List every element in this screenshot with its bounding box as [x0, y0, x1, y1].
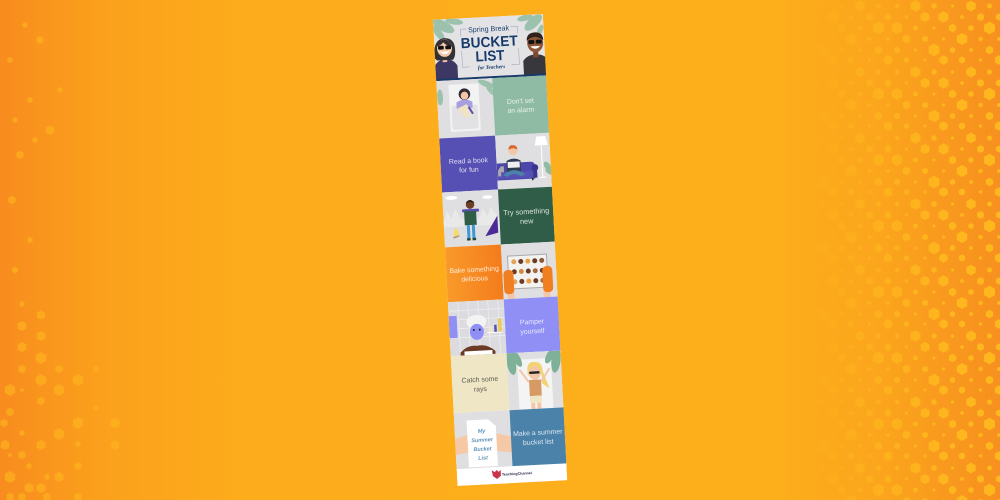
row 3 right: Try something new: Try something	[503, 206, 549, 217]
title: Spring Break: Spring Break	[468, 23, 510, 34]
paper text	[471, 428, 495, 462]
title: for Teachers: for Teachers	[478, 64, 505, 71]
row 6 left: Catch some rays: Catch some	[461, 376, 499, 385]
campfire	[453, 228, 459, 238]
header panel	[430, 11, 548, 81]
character: man	[522, 32, 547, 75]
row 4 right: cookie tray	[501, 242, 558, 299]
row 1 left: sleeping in bed	[436, 77, 499, 139]
sunbather	[519, 361, 551, 410]
row 5 right: Pamper yourself	[504, 297, 560, 353]
blanket	[452, 104, 479, 130]
palm leaves	[504, 347, 563, 376]
paper	[467, 419, 498, 467]
palm leaves	[437, 80, 493, 106]
palm leaves left	[433, 18, 463, 40]
hiker	[461, 200, 481, 241]
poster: bucket list	[430, 10, 572, 486]
distant trees	[443, 207, 500, 227]
right oven mitt	[542, 266, 554, 297]
row 1 right: Don't set an alarm: an alarm	[507, 107, 535, 115]
row 3 right: Try something new	[498, 187, 555, 244]
right hand	[495, 432, 512, 453]
row 6 left: Catch some rays	[451, 353, 510, 413]
row 3 left: camping	[442, 190, 501, 247]
cat	[498, 166, 504, 176]
row 2 left: Read a book for fun: for fun	[459, 167, 479, 175]
woman with towel and mask	[459, 314, 496, 356]
row 5 left: face mask and bath	[448, 299, 507, 356]
navy header rule	[436, 73, 546, 81]
baking tray	[507, 254, 548, 289]
row 1 right: Don't set an alarm: Don't set	[507, 98, 534, 106]
row 4 left: Bake something delicious: delicious	[461, 275, 489, 284]
bed	[448, 83, 481, 132]
sleeping woman	[456, 88, 473, 109]
paper text: My	[478, 428, 487, 435]
row 4 left: Bake something delicious: Bake something	[449, 266, 499, 275]
floor lamp	[534, 136, 548, 178]
title frame	[461, 26, 519, 67]
cookies	[511, 258, 545, 284]
cloud right	[482, 195, 492, 199]
left oven mitt	[503, 270, 515, 299]
character: woman	[433, 38, 458, 80]
row 7 right: Make a summer bucket list: Make a summer	[513, 428, 563, 438]
row 5 right: Pamper yourself: Pamper	[520, 318, 545, 327]
lavender	[469, 107, 473, 114]
palm leaves right	[517, 14, 544, 34]
footer logo: Teaching Channel	[492, 468, 532, 479]
shelf with bottles	[487, 319, 502, 333]
row 2 right: reading on couch	[495, 133, 556, 190]
row 3 right: Try something new: new	[520, 216, 534, 226]
title: LIST: LIST	[475, 48, 505, 66]
row 6 right: woman in hammock	[504, 347, 565, 410]
row 7 right: Make a summer bucket list: bucket list	[523, 438, 554, 447]
plant	[544, 162, 552, 175]
background: hexagons left	[0, 22, 120, 500]
cloud left	[446, 196, 458, 200]
row 5 right: Pamper yourself: yourself	[520, 328, 545, 336]
row 4 left: Bake something delicious	[445, 244, 504, 302]
couch	[497, 161, 539, 182]
tent	[484, 216, 498, 236]
row 2 left: Read a book for fun: Read a book	[449, 157, 489, 166]
hanging towel	[449, 316, 458, 338]
hammock	[517, 358, 553, 410]
open book	[457, 104, 474, 119]
footer logo: Teaching Channel: TeachingChannel	[502, 471, 532, 477]
paper text: List	[478, 455, 488, 462]
wall tiles	[448, 299, 507, 356]
row 2 left: Read a book for fun	[439, 136, 498, 192]
row 7 right: Make a summer bucket list	[510, 407, 566, 466]
reading man	[504, 145, 525, 177]
row 7 left: summer bucket list paper	[454, 410, 512, 469]
row 6 left: Catch some rays: rays	[474, 386, 488, 394]
paper text: Summer	[471, 437, 494, 444]
title: BUCKET: BUCKET	[460, 33, 518, 52]
row 1 right: Don't set an alarm	[492, 75, 549, 136]
left hand	[455, 434, 470, 455]
background: hexagon pattern right	[858, 0, 1000, 500]
paper text: Bucket	[473, 446, 492, 453]
